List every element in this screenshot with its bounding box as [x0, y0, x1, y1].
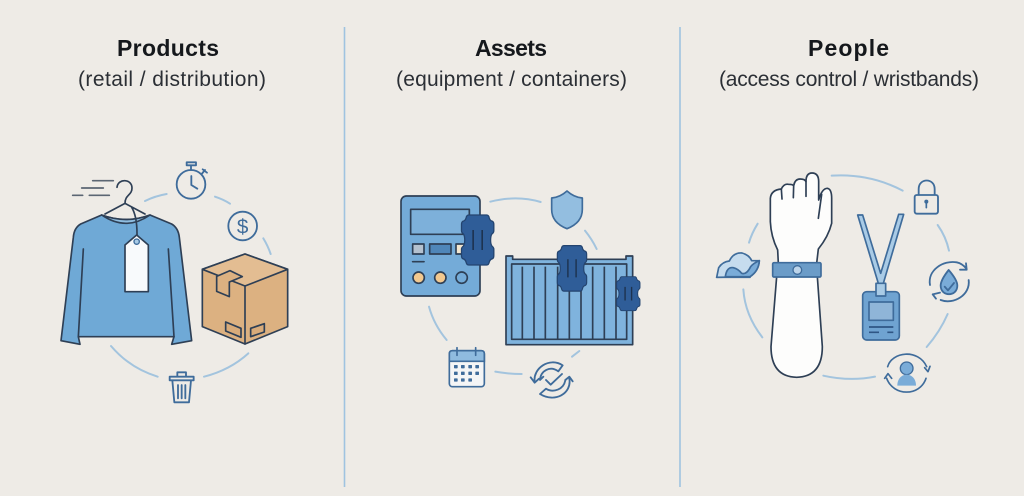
- icon: tag on container side: [617, 277, 640, 311]
- icon: trash can: [170, 372, 194, 402]
- icon: padlock: [915, 180, 938, 214]
- lifecycle ring arcs: [429, 198, 597, 374]
- icon: shield: [552, 191, 582, 229]
- wristband: [773, 263, 821, 277]
- panel: people illustration: [717, 173, 969, 392]
- icon: equipment controller: [401, 196, 480, 296]
- icon: motion lines: [73, 181, 113, 195]
- heading: People: [719, 35, 979, 91]
- icon: dollar coin: [228, 212, 257, 240]
- lifecycle ring arcs: [111, 194, 271, 377]
- heading: Products: (retail / distribution): [78, 68, 266, 91]
- forearm: [771, 277, 822, 377]
- icon: tag on controller: [461, 215, 494, 265]
- icon: price tag: [125, 235, 148, 292]
- icon: dollar coin: $: [237, 215, 249, 238]
- heading: People: (access control / wristbands): [719, 68, 979, 91]
- icon: cardboard box: [202, 254, 288, 344]
- icon: cloud wave: [717, 253, 759, 277]
- icon: calendar: [449, 348, 484, 387]
- icon: water drop cycle: [930, 262, 969, 301]
- icon: sync with check: [531, 362, 573, 398]
- heading: People: People: [808, 35, 889, 61]
- panel: assets illustration: [401, 191, 640, 398]
- heading: Assets: [396, 35, 627, 91]
- hand fist: [770, 173, 832, 263]
- heading: Products: [78, 35, 266, 91]
- icon: shipping container: [506, 256, 633, 345]
- icon: stopwatch: [177, 162, 207, 199]
- panel: products illustration: [61, 162, 288, 402]
- heading: Assets: Assets: [475, 35, 547, 61]
- heading: Assets: (equipment / containers): [396, 68, 627, 91]
- icon: lanyard badge: [858, 214, 904, 340]
- icon: shirt: [61, 215, 192, 344]
- icon: hanger: [105, 181, 145, 236]
- icon: tag on container top: [557, 246, 587, 291]
- lifecycle ring arcs: [743, 175, 949, 379]
- icon: person cycle: [885, 354, 930, 392]
- heading: Products: Products: [117, 35, 219, 61]
